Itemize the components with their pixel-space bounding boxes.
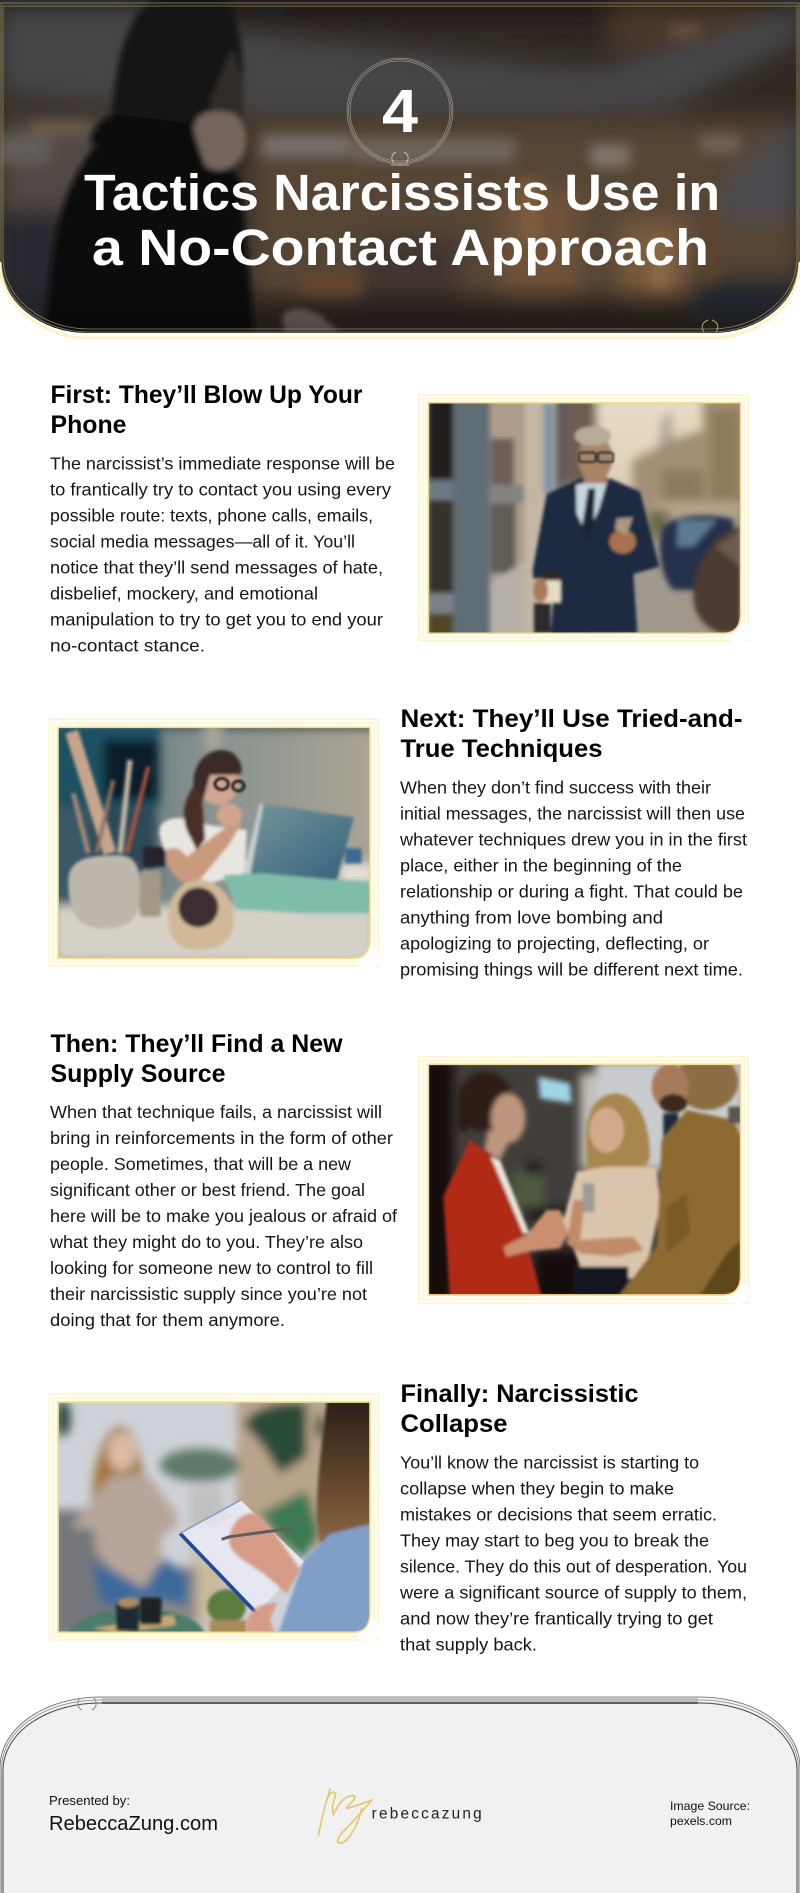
section 4: heading and text: were a significant source of supply to them,: [399, 1582, 747, 1602]
section 1: heading and text: no-contact stance.: [50, 635, 205, 655]
section 3: heading and text: Supply Source: [50, 1060, 226, 1088]
section 3: heading and text: looking for someone new to control to fill: [50, 1258, 373, 1278]
section 1: heading and text: First: They’ll Blow Up Your: [50, 381, 363, 409]
section 3: heading and text: doing that for them anymore.: [50, 1310, 285, 1330]
section 3: photo of three people talking: [419, 1053, 751, 1304]
section 2: heading and text: Next: They’ll Use Tried-and-: [400, 705, 742, 733]
section 2: heading and text: place, either in the beginning of the: [400, 856, 682, 876]
section 2: heading and text: promising things will be different next time.: [400, 960, 743, 980]
section 3: heading and text: their narcissistic supply since you’re not: [50, 1284, 367, 1304]
footer panel: [0, 1697, 800, 1893]
title: [84, 164, 720, 276]
header ornamental border: [0, 3, 800, 338]
title: Tactics Narcissists Use in: [84, 164, 720, 221]
section 1: heading and text: to frantically try to contact you using every: [50, 479, 391, 499]
number badge ring: [347, 58, 453, 165]
section 4: photo of therapy session: [49, 1394, 381, 1665]
section 2: heading and text: whatever techniques drew you in in the first: [399, 830, 747, 850]
presented by: RebeccaZung.com: [49, 1813, 218, 1835]
image source: [670, 1799, 750, 1828]
section 4: heading and text: silence. They do this out of desperation. You: [400, 1556, 747, 1576]
section 2: heading and text: When they don’t find success with their: [400, 778, 711, 798]
section 3: heading and text: significant other or best friend. The goal: [50, 1180, 365, 1200]
presented by: [49, 1793, 218, 1835]
section 4: heading and text: and now they’re frantically trying to get: [400, 1608, 713, 1628]
logo: rebeccazung signature: rebeccazung: [372, 1805, 482, 1822]
section 1: heading and text: disbelief, mockery, and emotional: [50, 583, 318, 603]
section 4: heading and text: Collapse: [400, 1410, 508, 1438]
section 2: heading and text: anything from love bombing and: [400, 908, 663, 928]
section 1: heading and text: The narcissist’s immediate response will be: [50, 453, 395, 473]
section 4: heading and text: [399, 1380, 747, 1654]
section 4: heading and text: collapse when they begin to make: [400, 1478, 674, 1498]
section 4: heading and text: Finally: Narcissistic: [400, 1380, 639, 1408]
section 2: heading and text: [399, 705, 747, 980]
section 4: heading and text: You’ll know the narcissist is starting to: [400, 1452, 699, 1472]
section 1: heading and text: possible route: texts, phone calls, emails,: [50, 505, 373, 525]
section 4: heading and text: that supply back.: [400, 1634, 537, 1654]
section 3: heading and text: When that technique fails, a narcissist will: [50, 1102, 382, 1122]
header banner: [0, 0, 800, 345]
section 2: heading and text: relationship or during a fight. That could be: [400, 882, 743, 902]
section 3: heading and text: Then: They’ll Find a New: [50, 1030, 343, 1058]
section 1: heading and text: social media messages—all of it. You’ll: [50, 531, 355, 551]
image source: pexels.com: [670, 1814, 732, 1828]
section 2: photo of woman at laptop: [49, 719, 381, 967]
section 1: heading and text: [50, 381, 395, 655]
section 3: heading and text: bring in reinforcements in the form of other: [50, 1128, 393, 1148]
section 3: heading and text: people. Sometimes, that will be a new: [50, 1154, 351, 1174]
section 4: heading and text: They may start to beg you to break the: [400, 1530, 709, 1550]
section 3: heading and text: what they might do to you. They’re also: [49, 1232, 363, 1252]
section 4: heading and text: mistakes or decisions that seem erratic.: [400, 1504, 717, 1524]
image source: Image Source:: [670, 1799, 750, 1813]
section 1: photo of man with phone: [419, 395, 751, 642]
section 2: heading and text: True Techniques: [400, 735, 602, 763]
section 3: heading and text: here will be to make you jealous or afraid of: [50, 1206, 397, 1226]
section 3: heading and text: [49, 1030, 397, 1330]
section 1: heading and text: notice that they’ll send messages of hate,: [50, 557, 383, 577]
logo: rebeccazung signature: [318, 1789, 482, 1843]
title: a No-Contact Approach: [92, 219, 709, 276]
presented by: Presented by:: [49, 1793, 130, 1808]
section 2: heading and text: initial messages, the narcissist will then use: [400, 804, 745, 824]
section 1: heading and text: Phone: [50, 411, 127, 439]
section 2: heading and text: apologizing to projecting, deflecting, or: [400, 934, 709, 954]
number 4: 4: [382, 77, 418, 145]
section 1: heading and text: manipulation to try to get you to end your: [50, 609, 383, 629]
header background photo: [0, 0, 800, 345]
